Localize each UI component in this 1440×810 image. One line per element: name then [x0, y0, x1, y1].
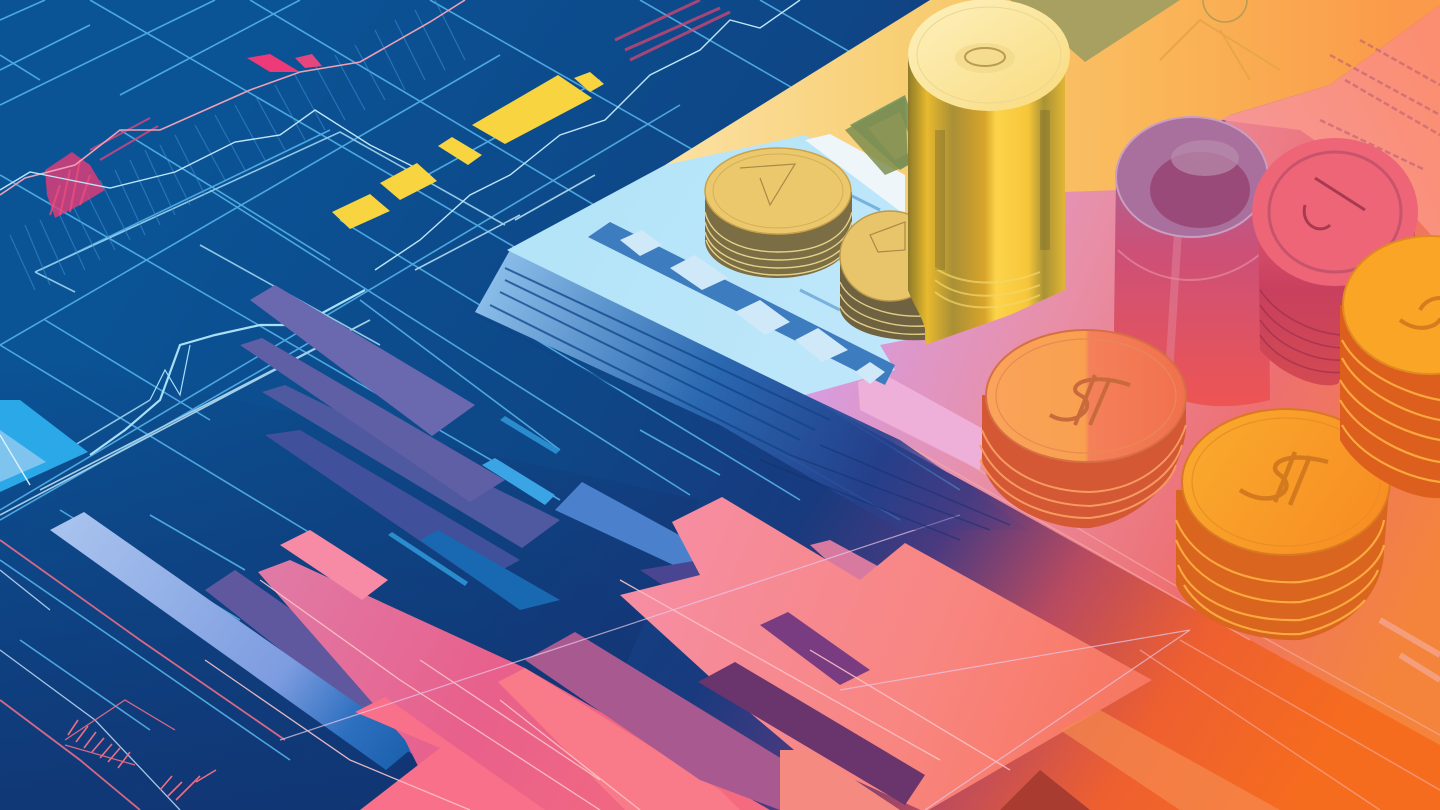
- purple bar behind pink: [205, 570, 520, 800]
- salmon bar mass: [620, 497, 1280, 810]
- orange coin stack lower: [1176, 409, 1390, 640]
- pink bars lower left: [258, 530, 770, 810]
- fine hatch chart columns: [10, 0, 465, 290]
- orange coin stack centre: [980, 330, 1186, 528]
- coin stack: gold small: [840, 211, 940, 340]
- yellow bars: [332, 72, 604, 229]
- red and pink chart marks: [45, 0, 730, 218]
- coin face: dollar: [1182, 409, 1390, 555]
- coin face: gold left: [705, 148, 851, 234]
- pink bill sheet: [858, 372, 985, 470]
- orange coin stack right: [1340, 236, 1440, 498]
- cylinder top: [908, 0, 1070, 111]
- coin face: dollar: [986, 330, 1186, 462]
- purple cylinder: [1114, 117, 1270, 406]
- lower left navy shade: [0, 350, 700, 810]
- paper stack edges right: [860, 400, 1440, 810]
- light blue bar left: [0, 400, 88, 492]
- coin face: right: [1343, 236, 1440, 374]
- small pink chart hatches: [68, 720, 216, 800]
- grid lines and chart wires: [0, 0, 960, 760]
- yellow banknote: [665, 0, 1440, 330]
- light blue banknote top: [507, 134, 905, 395]
- blue bars centre: [388, 416, 725, 610]
- gold cylinder: [908, 0, 1070, 345]
- right paper under coins: [805, 100, 1440, 745]
- dark and purple bars lower centre: [525, 540, 885, 810]
- banknote stack edges: [475, 250, 1030, 540]
- dark green note corner: [845, 97, 908, 175]
- thin light traces on bars: [0, 515, 1190, 810]
- purple bars centre: [240, 285, 560, 582]
- pink coin stack: [1252, 138, 1418, 385]
- coin stack: gold left: [705, 148, 852, 278]
- line chart upper: [0, 0, 800, 455]
- long blue bar: [50, 512, 416, 770]
- document sheet top right: [1220, 5, 1440, 245]
